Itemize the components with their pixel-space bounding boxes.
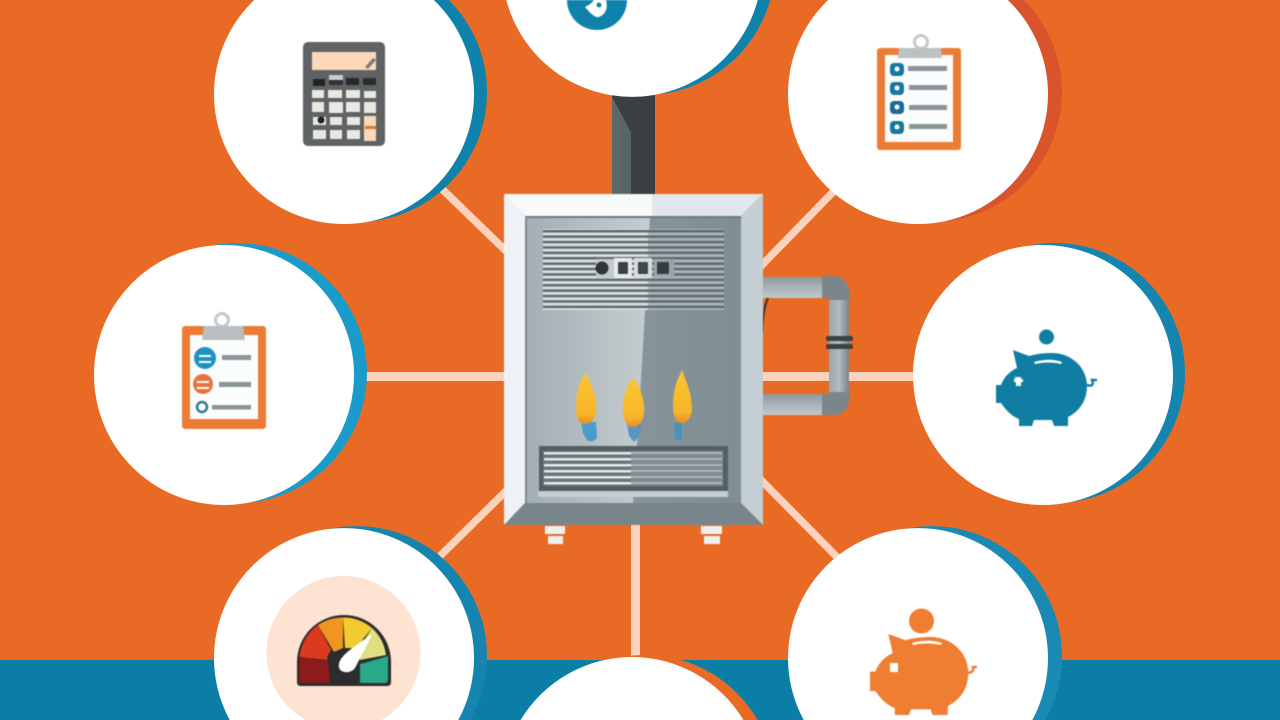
- icon: piggy bank: [996, 330, 1097, 426]
- circle: status list: [94, 243, 367, 505]
- burner flames: [576, 370, 692, 442]
- icon: calculator: [303, 42, 385, 146]
- circle: orange piggy bank: [788, 526, 1062, 720]
- boiler front panel: [525, 216, 741, 503]
- mounting feet: [545, 526, 722, 544]
- circle: bottom centre: [521, 655, 758, 720]
- control buttons: [596, 258, 674, 278]
- bottom band: [0, 660, 1280, 720]
- circle: checklist: [788, 0, 1062, 224]
- lower vent: [539, 446, 728, 491]
- circle: blue piggy bank: [913, 243, 1185, 505]
- icon: gauge: [297, 615, 391, 686]
- pipework: [762, 276, 853, 415]
- icon: coin: [567, 0, 627, 30]
- upper vent grille: [543, 229, 724, 310]
- boiler: [504, 194, 763, 544]
- circle: top centre coin: [506, 0, 770, 97]
- connector lines: [360, 187, 920, 665]
- circle: efficiency gauge: [214, 526, 487, 720]
- flue pipe: [612, 90, 655, 196]
- circle: calculator: [214, 0, 487, 224]
- boiler frame: [504, 194, 763, 525]
- icon: gauge disc: [266, 576, 421, 720]
- icon: clipboard status list: [182, 314, 266, 429]
- icon: orange piggy bank: [870, 608, 977, 715]
- icon: clipboard checklist: [877, 36, 961, 150]
